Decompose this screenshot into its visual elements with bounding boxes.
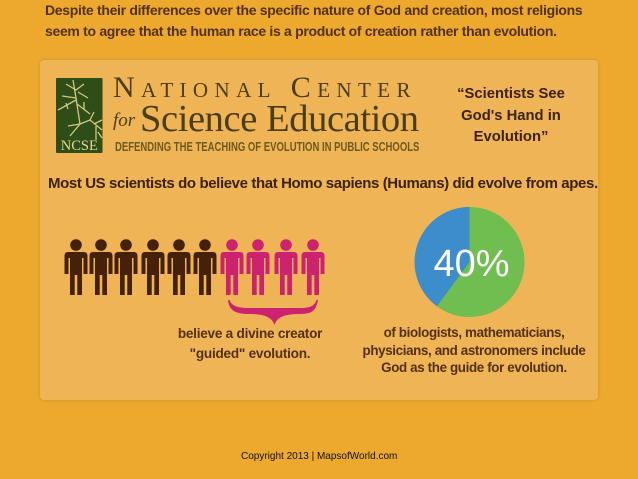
- logo: wordmark: for: [113, 110, 135, 131]
- logo: wordmark: [113, 71, 419, 154]
- heading text: [45, 2, 582, 39]
- caption: scientists: physicians, and astronomers include: [363, 343, 585, 358]
- brown people: [64, 239, 216, 295]
- caption: scientists: [363, 325, 586, 375]
- logo: wordmark: DEFENDING THE TEACHING OF EVOLUTION IN PUBLIC SCHOOLS: [115, 139, 419, 154]
- pink people: [220, 239, 324, 295]
- logo: NCSE tree emblem: NCSE: [61, 138, 98, 154]
- caption: scientists: of biologists, mathematicians,: [384, 325, 564, 340]
- caption: divine creator: believe a divine creator: [178, 326, 322, 341]
- panel: NCSE study: [40, 60, 598, 400]
- caption: divine creator: "guided" evolution.: [190, 346, 310, 360]
- quote: “Scientists See: [457, 86, 565, 102]
- caption: divine creator: [178, 326, 322, 361]
- pictogram: ten people: [64, 239, 324, 325]
- brace: [228, 300, 318, 325]
- quote: Evolution”: [474, 129, 548, 145]
- caption: scientists: God as the guide for evolution.: [381, 360, 567, 375]
- quote: God's Hand in: [461, 108, 561, 124]
- quote: [457, 86, 565, 145]
- pie chart: 40%: 40%: [433, 243, 510, 285]
- logo: wordmark: NATIONAL CENTER: [113, 71, 417, 104]
- copyright footer: Copyright 2013 | MapsofWorld.com: [241, 451, 397, 462]
- logo: wordmark: Science Education: [140, 98, 419, 140]
- statement text: Most US scientists do believe that Homo sapiens (Humans) did evolve from apes.: [48, 175, 598, 192]
- heading text: Despite their differences over the specific nature of God and creation, most religions: [45, 2, 582, 18]
- logo: NCSE tree emblem: [56, 78, 102, 154]
- pie chart: 40%: [414, 207, 524, 317]
- heading text: seem to agree that the human race is a product of creation rather than evolution.: [45, 22, 557, 38]
